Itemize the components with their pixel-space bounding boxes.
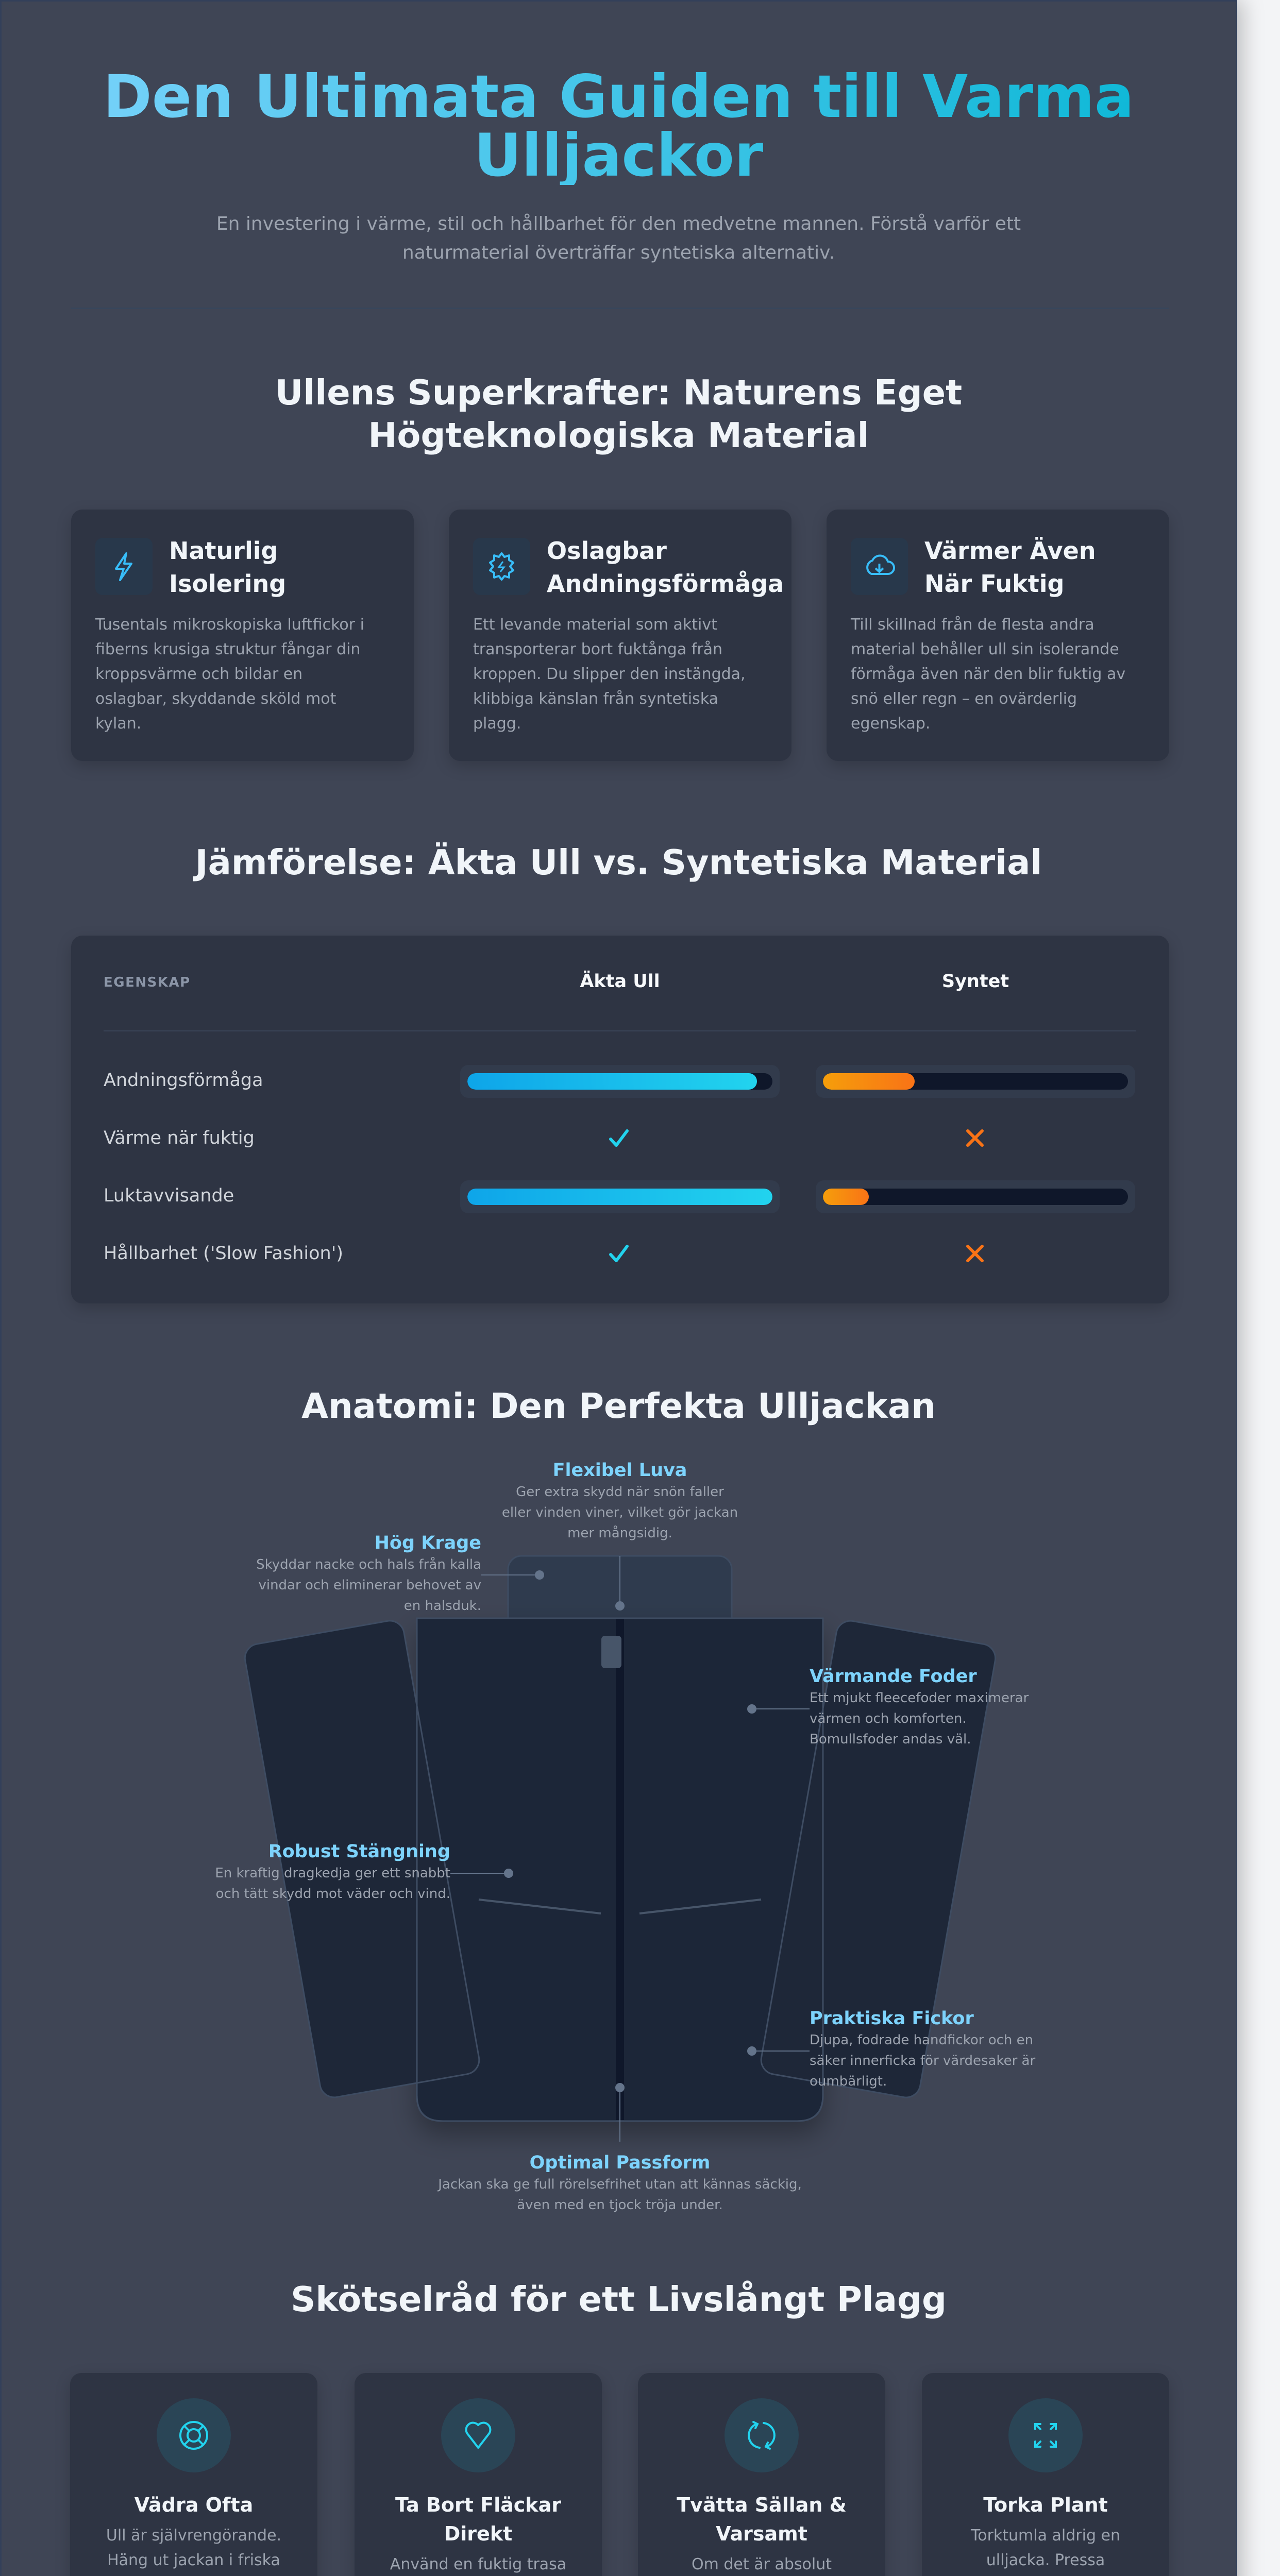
heading: superkrafter bbox=[275, 372, 962, 455]
card: Naturlig Isolering bbox=[71, 510, 414, 761]
label: Flexibel Luva bbox=[502, 1460, 738, 1541]
title: Ulljackor bbox=[474, 121, 763, 190]
card: Vädra Ofta: Ull är självrengörande. bbox=[106, 2527, 281, 2545]
card: Värmer Även När Fuktig: När Fuktig bbox=[924, 570, 1064, 598]
card: Oslagbar Andningsförmåga: kroppen. Du slipper den instängda, bbox=[473, 665, 746, 683]
label: Robust Stängning: En kraftig dragkedja ger ett snabbt bbox=[215, 1866, 450, 1881]
card: Tvätta Sällan & Varsamt: Om det är absolut bbox=[692, 2555, 832, 2573]
card: Oslagbar Andningsförmåga bbox=[449, 510, 791, 761]
hood bbox=[508, 1556, 732, 1633]
label: Optimal Passform: även med en tjock tröja under. bbox=[517, 2197, 723, 2213]
card: Oslagbar Andningsförmåga: transporterar bort fuktånga från bbox=[473, 640, 722, 658]
card: Tvätta Sällan & Varsamt: Tvätta Sällan & bbox=[677, 2494, 847, 2516]
label: Hög Krage: Hög Krage bbox=[375, 1533, 481, 1553]
card: Värmer Även När Fuktig: Till skillnad från de flesta andra bbox=[851, 616, 1094, 634]
card: Torka Plant: ulljacka. Pressa bbox=[986, 2551, 1105, 2569]
icon: gear bbox=[473, 538, 530, 595]
label: Hög Krage: Skyddar nacke och hals från kalla bbox=[256, 1557, 481, 1572]
label: Praktiska Fickor: Praktiska Fickor bbox=[810, 2008, 974, 2029]
card: Vädra Ofta bbox=[70, 2373, 317, 2576]
label: Flexibel Luva: Flexibel Luva bbox=[553, 1460, 687, 1481]
subtitle: En investering i värme, stil och hållbarhet för den medvetne mannen. Förstå varför ett bbox=[216, 213, 1021, 234]
label: Optimal Passform: Jackan ska ge full rörelsefrihet utan att kännas säckig, bbox=[438, 2177, 802, 2192]
card: Ta Bort Fläckar Direkt: Använd en fuktig trasa bbox=[390, 2555, 566, 2573]
label: Optimal Passform: Optimal Passform bbox=[530, 2153, 710, 2173]
card: Oslagbar Andningsförmåga: klibbiga känslan från syntetiska bbox=[473, 690, 718, 708]
card: Värmer Även När Fuktig: Värmer Även bbox=[924, 537, 1096, 565]
label: Praktiska Fickor: oumbärligt. bbox=[810, 2074, 887, 2089]
panel: comparison table: Äkta Ull bbox=[580, 971, 660, 992]
card: Värmer Även När Fuktig: förmåga även när den blir fuktig av bbox=[851, 665, 1125, 683]
pockets bbox=[479, 1900, 761, 1913]
card: Oslagbar Andningsförmåga: Oslagbar bbox=[547, 537, 667, 565]
card: Ta Bort Fläckar Direkt: Ta Bort Fläckar bbox=[395, 2494, 561, 2516]
row: Värme när fuktig: Värme när fuktig bbox=[104, 1128, 255, 1148]
label: Praktiska Fickor: säker innerficka för värdesaker är bbox=[810, 2053, 1035, 2069]
card: Vädra Ofta: Vädra Ofta bbox=[134, 2494, 253, 2516]
card: Naturlig Isolering: Naturlig bbox=[169, 537, 278, 565]
subtitle: naturmaterial överträffar syntetiska alternativ. bbox=[402, 242, 835, 263]
card: Vädra Ofta: Häng ut jackan i friska bbox=[107, 2551, 280, 2569]
callout pointers bbox=[450, 1556, 810, 2142]
card: Ta Bort Fläckar Direkt: Direkt bbox=[444, 2522, 512, 2545]
card: Oslagbar Andningsförmåga: plagg. bbox=[473, 715, 521, 733]
icon: lightning bbox=[95, 538, 153, 595]
label: Hög Krage: en halsduk. bbox=[404, 1598, 481, 1614]
label: Flexibel Luva: Ger extra skydd när snön faller bbox=[516, 1484, 724, 1500]
icon: heart bbox=[441, 2398, 515, 2472]
label: Robust Stängning: Robust Stängning bbox=[268, 1841, 450, 1862]
icon: cloud bbox=[851, 538, 908, 595]
card: Naturlig Isolering: fiberns krusiga struktur fångar din bbox=[95, 640, 360, 658]
left sleeve bbox=[243, 1619, 481, 2099]
card: Naturlig Isolering: oslagbar, skyddande sköld mot bbox=[95, 690, 336, 708]
title bbox=[2, 67, 1236, 185]
right sleeve bbox=[759, 1619, 998, 2099]
label: Värmande Foder: Värmande Foder bbox=[810, 1666, 977, 1687]
panel: comparison table: Syntet bbox=[942, 971, 1009, 992]
label: Robust Stängning bbox=[215, 1841, 450, 1902]
card: Naturlig Isolering: Isolering bbox=[169, 570, 286, 598]
card: Oslagbar Andningsförmåga: Ett levande material som aktivt bbox=[473, 616, 717, 634]
icon: expand arrows bbox=[1008, 2398, 1083, 2472]
heading: anatomi: Anatomi: Den Perfekta Ulljackan bbox=[301, 1386, 936, 1426]
label: Hög Krage: vindar och eliminerar behovet av bbox=[258, 1578, 481, 1593]
label: Optimal Passform bbox=[437, 2153, 802, 2213]
card: Värmer Även När Fuktig: snö eller regn – en ovärderlig bbox=[851, 690, 1077, 708]
zipper bbox=[601, 1619, 624, 2120]
row: Andningsförmåga: Andningsförmåga bbox=[104, 1070, 263, 1091]
label: Värmande Foder: Ett mjukt fleecefoder maximerar bbox=[810, 1690, 1029, 1706]
row: Luktavvisande: Luktavvisande bbox=[104, 1185, 234, 1206]
card: Torka Plant: Torka Plant bbox=[983, 2494, 1108, 2516]
icon: life buoy bbox=[157, 2398, 231, 2472]
label: Värmande Foder bbox=[810, 1666, 1029, 1747]
heading: superkrafter: Högteknologiska Material bbox=[368, 415, 869, 455]
label: Praktiska Fickor bbox=[810, 2008, 1036, 2089]
label: Värmande Foder: Bomullsfoder andas väl. bbox=[810, 1732, 971, 1747]
heading: skötselråd: Skötselråd för ett Livslångt Plagg bbox=[291, 2279, 947, 2319]
jacket diagram bbox=[244, 1555, 996, 2142]
icon: refresh bbox=[725, 2398, 799, 2472]
table header: EGENSKAP bbox=[104, 975, 191, 990]
body bbox=[417, 1618, 823, 2121]
label: Hög Krage bbox=[256, 1533, 481, 1614]
label: Flexibel Luva: mer mångsidig. bbox=[567, 1526, 672, 1541]
title: Den Ultimata Guiden till Varma bbox=[103, 62, 1134, 131]
panel: comparison table bbox=[71, 936, 1169, 1303]
label: Flexibel Luva: eller vinden viner, vilket gör jackan bbox=[502, 1505, 738, 1520]
card: Torka Plant bbox=[922, 2373, 1169, 2576]
label: Robust Stängning: och tätt skydd mot väder och vind. bbox=[216, 1886, 450, 1902]
subtitle bbox=[216, 213, 1021, 263]
card: Naturlig Isolering: Tusentals mikroskopiska luftfickor i bbox=[95, 616, 364, 634]
card: Naturlig Isolering: kylan. bbox=[95, 715, 141, 733]
card: Torka Plant: Torktumla aldrig en bbox=[971, 2527, 1120, 2545]
label: Värmande Foder: värmen och komforten. bbox=[810, 1711, 967, 1726]
card: Tvätta Sällan & Varsamt bbox=[638, 2373, 885, 2576]
card: Värmer Även När Fuktig: material behåller ull sin isolerande bbox=[851, 640, 1119, 658]
panel: feature cards bbox=[71, 510, 1169, 766]
body outline bbox=[417, 1618, 823, 2121]
row: Hållbarhet: Hållbarhet ('Slow Fashion') bbox=[104, 1243, 343, 1264]
heading: jämförelse: Jämförelse: Äkta Ull vs. Syntetiska Material bbox=[195, 842, 1042, 883]
card: Värmer Även När Fuktig bbox=[827, 510, 1169, 761]
card: Ta Bort Fläckar Direkt bbox=[355, 2373, 602, 2576]
card: Tvätta Sällan & Varsamt: Varsamt bbox=[716, 2522, 807, 2545]
heading: superkrafter: Ullens Superkrafter: Naturens Eget bbox=[275, 372, 962, 413]
card: Naturlig Isolering: kroppsvärme och bildar en bbox=[95, 665, 302, 683]
label: Praktiska Fickor: Djupa, fodrade handfickor och en bbox=[810, 2032, 1033, 2048]
card: Oslagbar Andningsförmåga: Andningsförmåga bbox=[547, 570, 784, 598]
card: Värmer Även När Fuktig: egenskap. bbox=[851, 715, 930, 733]
